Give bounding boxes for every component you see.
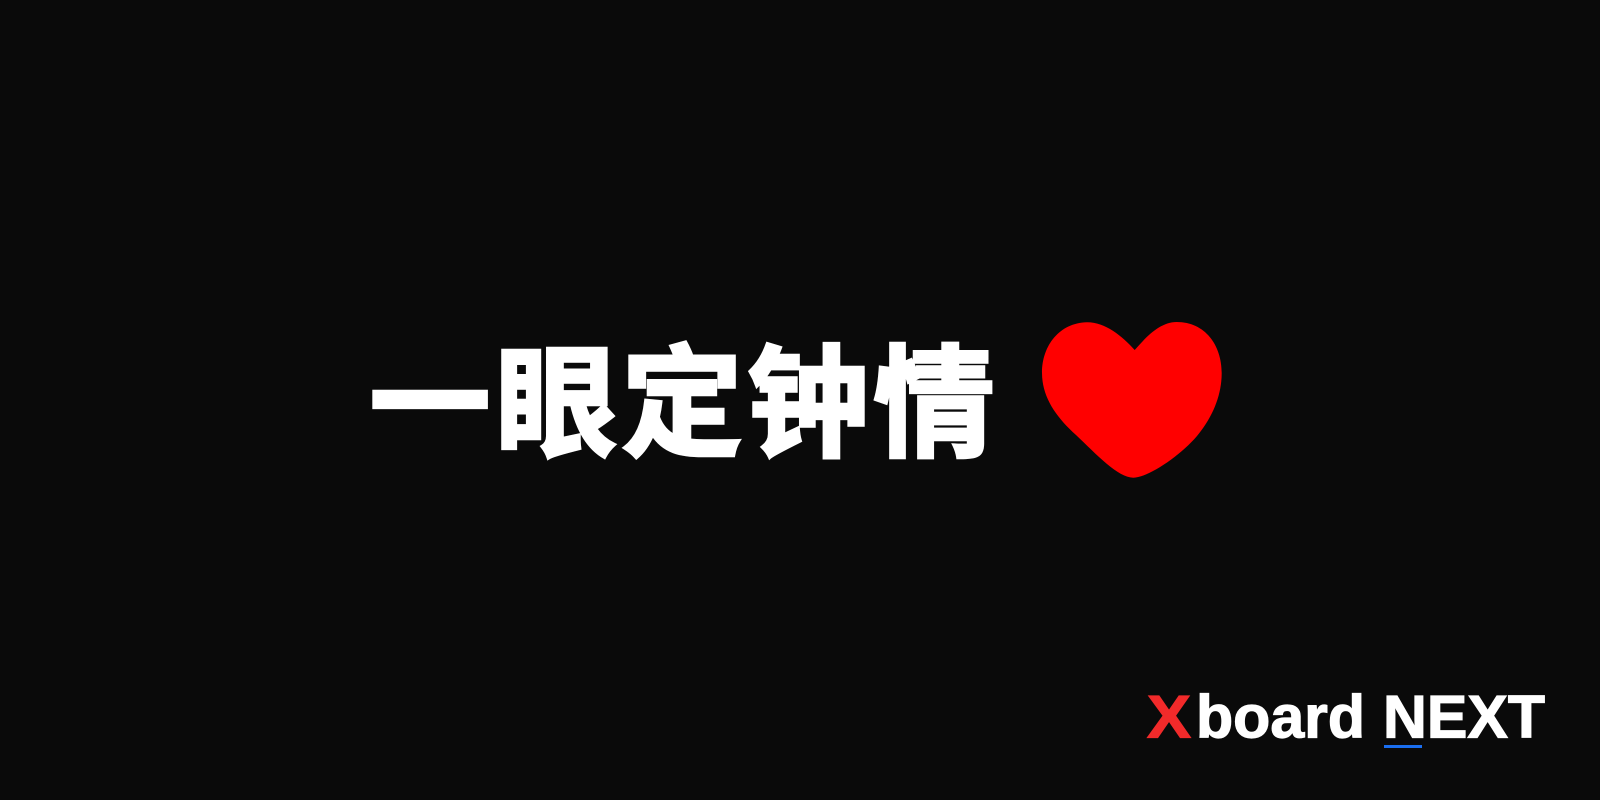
logo: Xboard NEXT: board	[1196, 684, 1365, 750]
logo: Xboard NEXT: NEXT	[1383, 684, 1545, 750]
icon: red heart	[1042, 322, 1222, 478]
logo: Xboard NEXT	[1147, 684, 1545, 750]
title: 一眼定钟情	[370, 336, 994, 472]
logo: Xboard NEXT: X	[1147, 684, 1191, 750]
